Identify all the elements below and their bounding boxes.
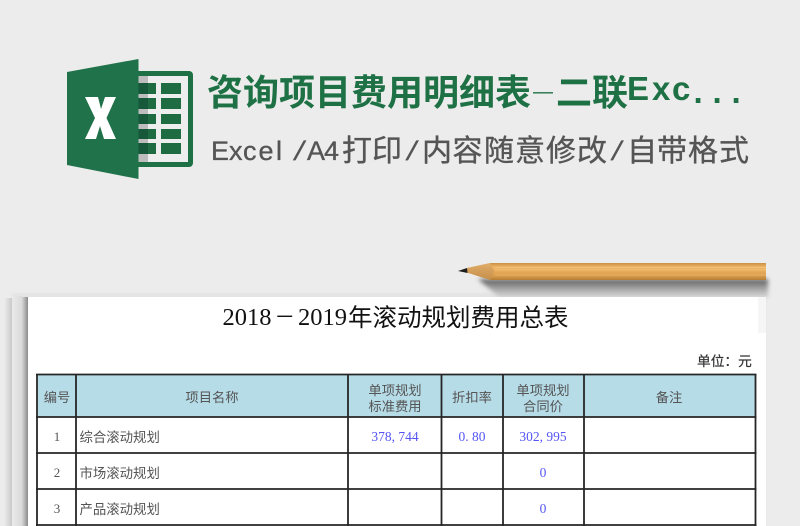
sheet title: 2018 xyxy=(222,304,272,331)
table header labels: 标准费用 xyxy=(368,399,422,414)
table row 2 xyxy=(54,465,547,481)
sheet title: – xyxy=(276,298,292,330)
title xyxy=(207,70,741,113)
table header labels: 编号 xyxy=(44,390,70,405)
table row 2: 市场滚动规划 xyxy=(80,465,160,481)
back sheet shadow xyxy=(4,293,766,526)
subtitle: l xyxy=(276,136,282,166)
table header labels: 单项规划 xyxy=(368,383,422,398)
title: E xyxy=(627,70,649,107)
subtitle: A xyxy=(307,136,325,166)
table row 3: 产品滚动规划 xyxy=(80,501,160,517)
table row 1: 综合滚动规划 xyxy=(80,429,160,445)
table row 1: 1 xyxy=(54,429,60,444)
table row 3: 3 xyxy=(54,501,60,516)
table header labels xyxy=(44,383,682,414)
table row 3: 0 xyxy=(540,501,547,516)
unit label: 单位：元 xyxy=(697,354,752,369)
title: . xyxy=(712,73,722,110)
table row 2: 0 xyxy=(540,465,547,480)
subtitle: 式 xyxy=(719,135,749,168)
subtitle: e xyxy=(258,136,274,166)
subtitle: c xyxy=(243,136,256,166)
table row 1: 0. 80 xyxy=(458,429,486,444)
sheet title: 2019 xyxy=(298,304,347,331)
sheet title: 年滚动规划费用总表 xyxy=(348,304,568,332)
subtitle: E xyxy=(211,136,229,166)
title: . xyxy=(732,73,741,110)
subtitle: 修 xyxy=(546,135,576,168)
icon: pencil xyxy=(458,263,768,298)
subtitle xyxy=(211,135,749,169)
table header labels: 合同价 xyxy=(523,399,563,414)
table row 1: 302, 995 xyxy=(519,429,567,444)
subtitle: 4 xyxy=(324,136,339,166)
subtitle: / xyxy=(404,139,420,169)
subtitle: 带 xyxy=(657,135,687,168)
subtitle: / xyxy=(292,139,308,169)
table header labels: 单项规划 xyxy=(516,383,570,398)
subtitle: x xyxy=(229,136,243,166)
icon: Excel logo xyxy=(67,59,193,179)
subtitle: 随 xyxy=(484,135,514,168)
panel: spreadsheet paper xyxy=(28,297,766,526)
title: . xyxy=(694,73,703,110)
table row 1 xyxy=(54,429,567,445)
table header labels: 备注 xyxy=(656,389,682,405)
subtitle: 内 xyxy=(422,135,452,168)
sheet title xyxy=(222,298,568,332)
table grid xyxy=(36,374,756,526)
table row 3 xyxy=(54,501,547,517)
title: 二联 xyxy=(556,72,628,113)
title: 咨询项目费用明细表 xyxy=(207,72,531,113)
table row 1: 378, 744 xyxy=(371,429,419,444)
title: x xyxy=(652,70,671,107)
title: c xyxy=(672,70,690,107)
subtitle: 改 xyxy=(577,135,607,168)
table row 2: 2 xyxy=(54,465,60,480)
subtitle: 打 xyxy=(342,135,372,168)
subtitle: 意 xyxy=(515,135,545,168)
table header labels: 项目名称 xyxy=(185,390,239,405)
subtitle: 自 xyxy=(627,135,657,168)
subtitle: 印 xyxy=(372,135,402,168)
subtitle: 格 xyxy=(688,135,718,168)
table header fill xyxy=(38,375,755,417)
subtitle: 容 xyxy=(452,135,482,168)
table header labels: 折扣率 xyxy=(452,389,492,405)
title: — xyxy=(533,81,553,103)
subtitle: / xyxy=(609,139,625,169)
